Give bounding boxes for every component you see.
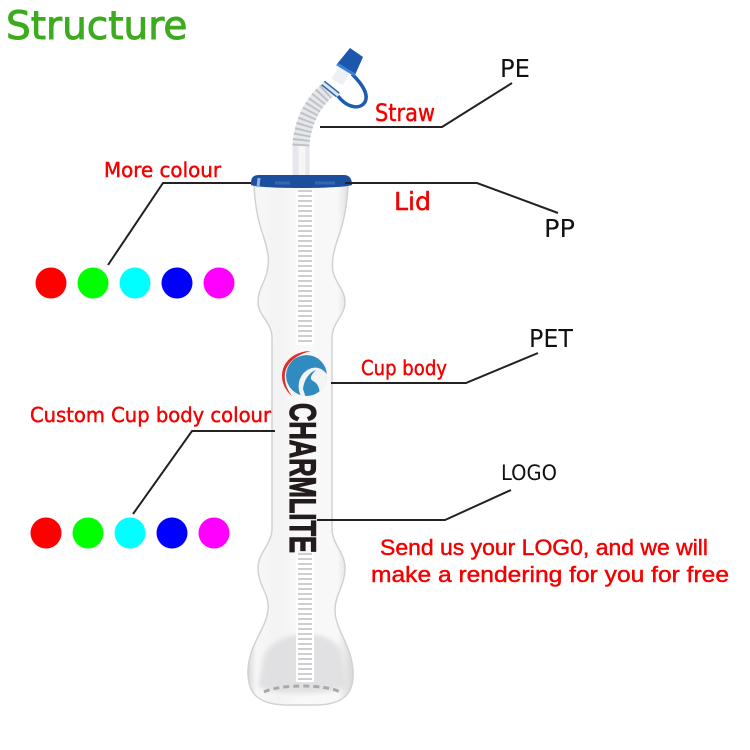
More colour leader [108, 183, 251, 265]
label: Custom Cup body colour: Custom Cup body colour [30, 403, 272, 427]
Lid leader [345, 183, 558, 213]
straw ribs [301, 88, 330, 146]
inner straw [296, 190, 314, 682]
logo wordmark: CHARMLITE [282, 403, 323, 553]
logo [282, 351, 328, 398]
label: PP: PP [544, 214, 575, 243]
straw tip [337, 69, 345, 82]
cup body [248, 186, 353, 705]
label: PE: PE [500, 54, 530, 83]
label: LOGO: LOGO [501, 461, 557, 485]
straw collar [323, 83, 338, 95]
logo swoosh [282, 351, 311, 396]
callout: free rendering: make a rendering for you for free [371, 562, 729, 587]
label: Cup body: Cup body [361, 356, 447, 380]
Custom colour leader [133, 431, 275, 514]
callout: free rendering: Send us your LOG0, and we will [380, 535, 708, 560]
cup illustration [248, 48, 366, 705]
label: Lid: Lid [394, 187, 431, 216]
cup body colour swatches [30, 518, 230, 548]
label: PET: PET [529, 324, 574, 353]
straw cap [337, 48, 363, 75]
upper straw [301, 88, 330, 176]
logo circle [286, 355, 328, 398]
cup base [258, 634, 346, 694]
PET leader [331, 353, 538, 383]
LOGO leader [317, 490, 511, 520]
straw cap tether [338, 74, 366, 107]
label: Straw: Straw [375, 99, 435, 127]
leader lines [108, 83, 558, 520]
lid colour swatches [36, 268, 234, 298]
label: More colour: More colour [104, 158, 222, 182]
PE leader [320, 83, 512, 127]
callout: free rendering [371, 535, 729, 587]
lid [251, 175, 352, 188]
title: Structure [6, 4, 187, 49]
